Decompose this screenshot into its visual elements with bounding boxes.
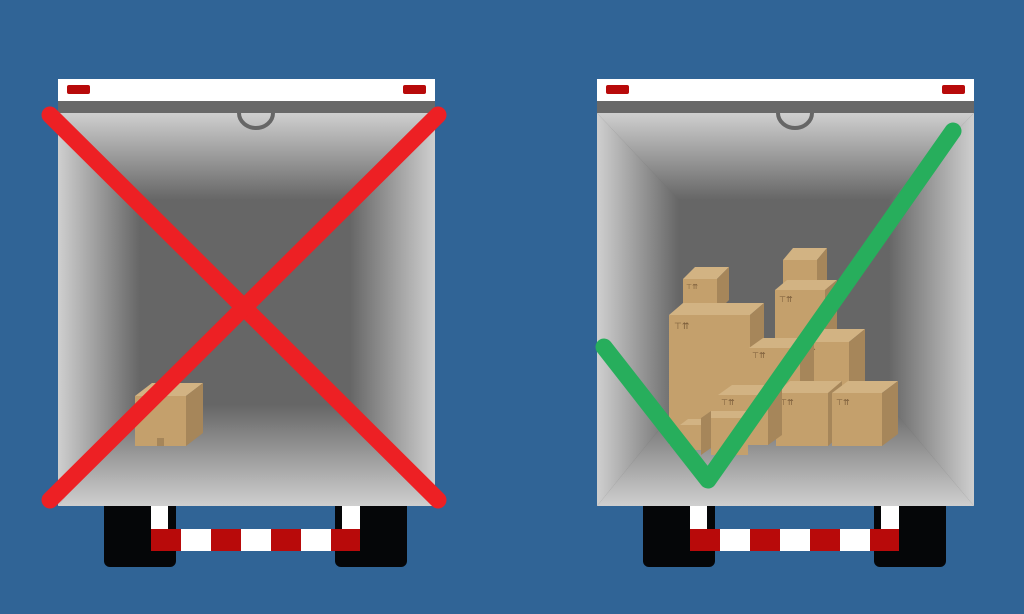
icon: single box (135, 383, 203, 446)
icon: stacked boxes: ⊤⇈ (780, 398, 794, 407)
icon: red X (50, 115, 438, 500)
icon: stacked boxes: ⊤⇈ (674, 321, 690, 331)
panel: wrong loading truck (50, 79, 438, 567)
icon: stacked boxes: ⇈ (809, 347, 816, 356)
icon: stacked boxes: ⊤⇈ (779, 295, 793, 304)
icon: stacked boxes: ⊤⇈ (752, 351, 766, 360)
icon: stacked boxes: ⊤⇈ (686, 283, 698, 291)
icon: stacked boxes (669, 248, 898, 455)
icon: green check mark (604, 131, 953, 480)
icon: stacked boxes: ⊤⇈ (836, 398, 850, 407)
icon: stacked boxes: ⊤⇈ (721, 398, 735, 407)
panel: correct loading truck (597, 79, 974, 567)
